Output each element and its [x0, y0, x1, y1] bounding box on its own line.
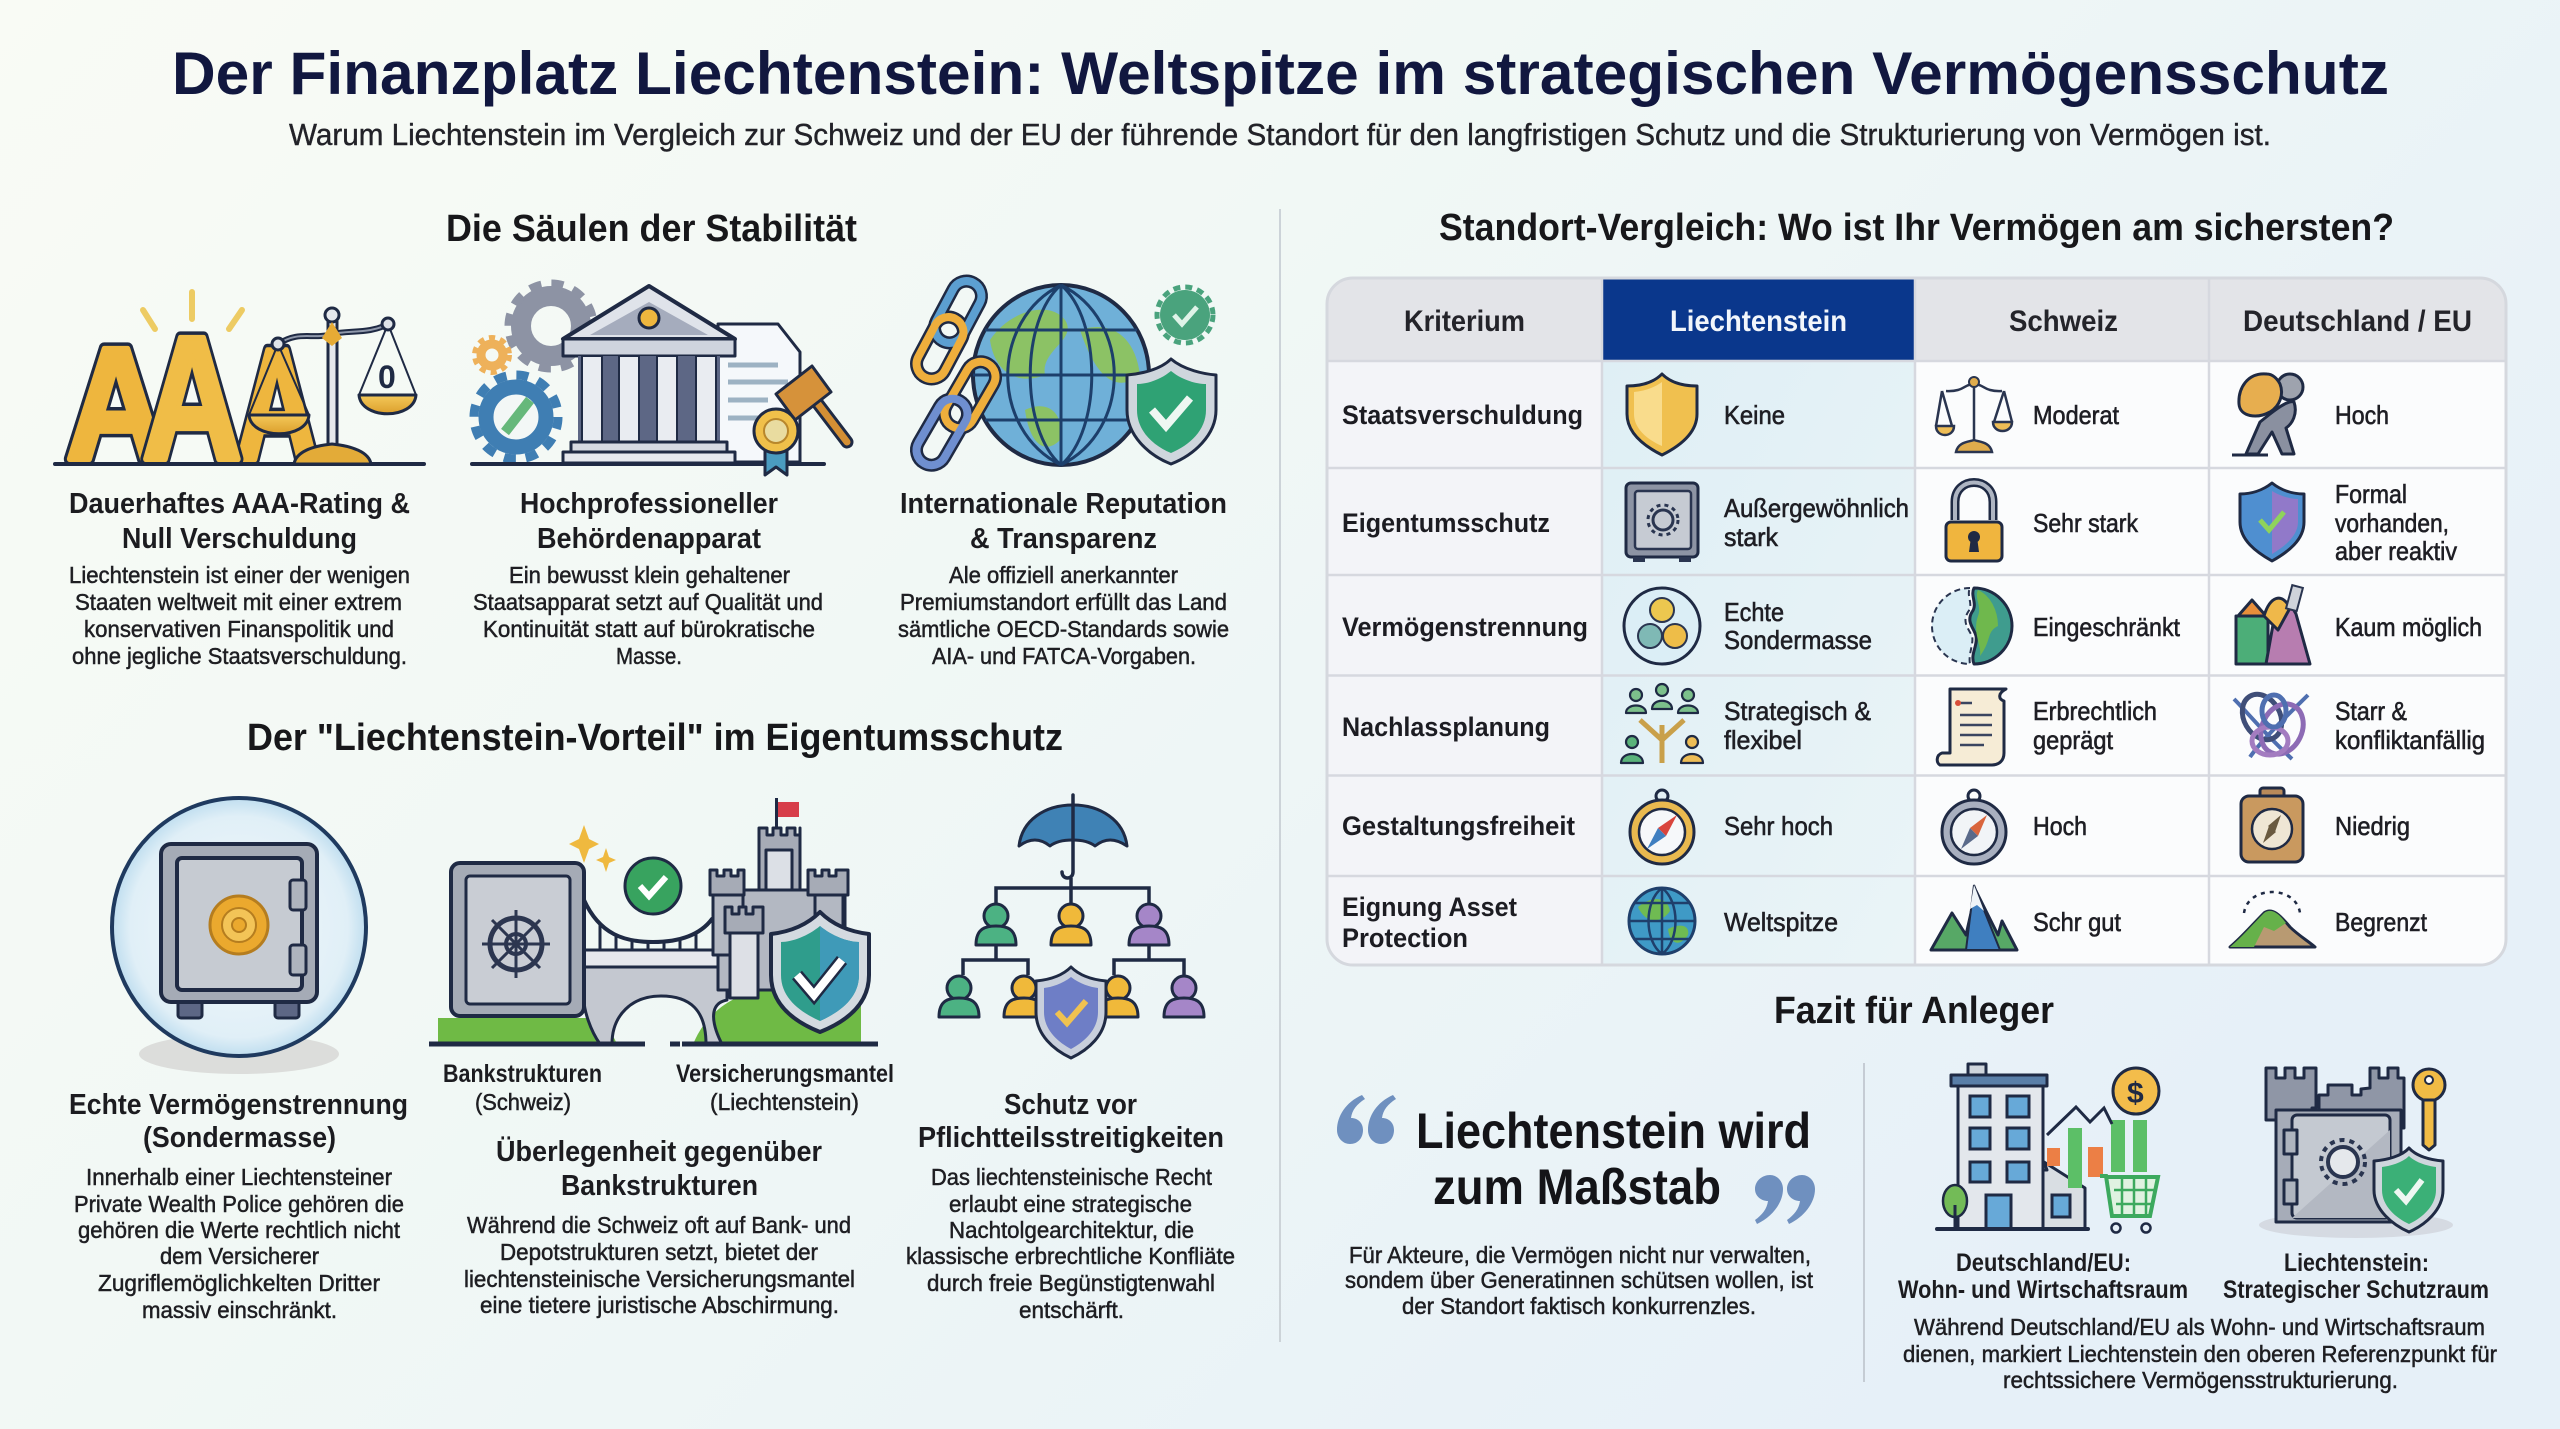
- row: Vermögenstrennung: Kaum möglich: [2335, 612, 2482, 642]
- card: AAA-Rating: [55, 292, 424, 669]
- callout heading: Liechtenstein wird: [1416, 1103, 1811, 1159]
- row: Staatsverschuldung: Moderat: [2033, 400, 2120, 430]
- row: Gestaltungsfreiheit: [1342, 788, 2410, 864]
- card body text: Private Wealth Police gehören die: [74, 1191, 404, 1217]
- heading: Standort-Vergleich: Standort-Vergleich: Wo ist Ihr Vermögen am sichersten?: [1439, 207, 2394, 249]
- row: Vermögenstrennung: Echte: [1724, 597, 1784, 627]
- subtitle: Warum Liechtenstein im Vergleich zur Schweiz und der EU der führende Standort für den langfristigen Schutz und die Strukturierung von Vermögen ist.: [289, 117, 2271, 152]
- card heading: Schutz vor: [1004, 1089, 1137, 1121]
- card body text: entschärft.: [1019, 1297, 1124, 1323]
- panel: Fazit für Anleger: [1337, 990, 2497, 1393]
- icon: padlock: [1946, 482, 2002, 561]
- quote body text: der Standort faktisch konkurrenzles.: [1402, 1293, 1756, 1319]
- table header: Kriterium: [1404, 305, 1525, 338]
- table header: [1404, 305, 2472, 338]
- card body text: ohne jegliche Staatsverschuldung.: [72, 643, 407, 669]
- card heading: [520, 488, 778, 555]
- icon: AAA letters with scale: A: [236, 317, 318, 493]
- card body text: liechtensteinische Versicherungsmantel: [464, 1266, 855, 1292]
- row: Gestaltungsfreiheit: Niedrig: [2335, 811, 2410, 841]
- card heading: [918, 1089, 1224, 1154]
- card body text: gehören die Werte rechtlich nicht: [78, 1217, 401, 1243]
- card heading: & Transparenz: [970, 523, 1157, 555]
- label: Bankstrukturen Schweiz: [443, 1060, 602, 1115]
- icon: person carrying sack: [2232, 374, 2303, 455]
- icon: bubble with coins: [1624, 588, 1700, 664]
- row: Vermögenstrennung: Eingeschränkt: [2033, 612, 2181, 642]
- icon: globe, chains, shield: [911, 276, 1216, 471]
- label: Versicherungsmantel Liechtenstein: [676, 1060, 894, 1115]
- title: Der Finanzplatz Liechtenstein: Weltspitze im strategischen Vermögensschutz: [172, 40, 2389, 107]
- card body text: [74, 1164, 404, 1323]
- card body text: klassische erbrechtliche Konfliäte: [906, 1243, 1235, 1269]
- icon: AAA letters with scale: A: [142, 301, 242, 497]
- card body text: dem Versicherer: [160, 1243, 319, 1269]
- row: Vermögenstrennung: Sondermasse: [1724, 625, 1872, 655]
- conclusion body text: [1903, 1314, 2497, 1393]
- row: Staatsverschuldung: Hoch: [2335, 400, 2389, 430]
- row: Eigentumsschutz: stark: [1724, 522, 1779, 552]
- row: Eignung Asset Protection: Eignung Asset: [1342, 892, 1517, 922]
- card body text: eine tietere juristische Abschirmung.: [480, 1292, 839, 1318]
- card heading: Überlegenheit gegenüber: [496, 1135, 822, 1168]
- label: Liechtenstein: [2223, 1249, 2489, 1304]
- icon: AAA letters with scale: A: [236, 317, 318, 493]
- row: Eigentumsschutz: [1342, 479, 2457, 566]
- icon: mountain: [1931, 885, 2017, 950]
- row: Eigentumsschutz: Eigentumsschutz: [1342, 508, 1550, 538]
- card body text: Nachtolgearchitektur, die: [949, 1217, 1194, 1243]
- card body text: Ale offiziell anerkannter: [949, 562, 1178, 588]
- icon: umbrella over family tree with shield: [939, 795, 1204, 1058]
- row: Staatsverschuldung: Staatsverschuldung: [1342, 400, 1583, 430]
- card heading: Null Verschuldung: [122, 523, 357, 555]
- label: Bankstrukturen Schweiz: Bankstrukturen: [443, 1060, 602, 1088]
- icon: silver compass: [1942, 790, 2006, 864]
- label: Versicherungsmantel Liechtenstein: Versicherungsmantel: [676, 1060, 894, 1088]
- row: Nachlassplanung: geprägt: [2033, 725, 2114, 755]
- row: Gestaltungsfreiheit: Gestaltungsfreiheit: [1342, 811, 1575, 841]
- card heading: Bankstrukturen: [561, 1170, 758, 1202]
- row: Eignung Asset Protection: [1342, 885, 2428, 954]
- label: Liechtenstein: Liechtenstein:: [2284, 1249, 2429, 1277]
- icon: gold compass: [1630, 790, 1694, 864]
- icon: institution with gears, document, gavel: [472, 284, 847, 475]
- heading: Liechtenstein-Vorteil: Der "Liechtenstein-Vorteil" im Eigentumsschutz: [247, 717, 1063, 759]
- icon: split circle: [1932, 588, 2012, 664]
- card body text: Das liechtensteinische Recht: [931, 1164, 1213, 1190]
- quote body text: sondem über Generatinnen schütsen wollen, ist: [1345, 1267, 1814, 1293]
- quote block: [1337, 1095, 1815, 1319]
- heading: Säulen: Die Säulen der Stabilität: [446, 208, 857, 250]
- icon: balance scale: [1936, 377, 2012, 452]
- heading: Fazit: Fazit für Anleger: [1774, 990, 2054, 1032]
- row: Eigentumsschutz: Außergewöhnlich: [1724, 493, 1909, 523]
- row: Eigentumsschutz: Formal: [2335, 479, 2407, 509]
- icon: AAA letters with scale: 0: [378, 359, 396, 395]
- card: Bankstrukturen: [429, 798, 894, 1318]
- card body text: [898, 562, 1229, 669]
- label: Deutschland/EU: Wohn- und Wirtschaftsraum: [1898, 1276, 2188, 1304]
- conclusion body text: dienen, markiert Liechtenstein den oberen Referenzpunkt für: [1903, 1341, 2497, 1367]
- row: Gestaltungsfreiheit: Sehr hoch: [1724, 811, 1833, 841]
- icon: family tree: [1621, 684, 1703, 763]
- icon: safe, bridge and castle: [429, 798, 878, 1044]
- card heading: [496, 1135, 822, 1202]
- icon: globe: [1629, 888, 1695, 954]
- row: Nachlassplanung: Strategisch &: [1724, 696, 1871, 726]
- label: Versicherungsmantel Liechtenstein: (Liechtenstein): [710, 1089, 859, 1115]
- row: Eignung Asset Protection: Weltspitze: [1724, 907, 1838, 937]
- label: Deutschland/EU: Deutschland/EU:: [1956, 1249, 2131, 1277]
- row: Vermögenstrennung: [1342, 585, 2482, 664]
- card body text: massiv einschränkt.: [142, 1297, 337, 1323]
- card heading: Hochprofessioneller: [520, 488, 778, 520]
- comparison table: [1327, 278, 2506, 965]
- icon: scroll: [1937, 689, 2006, 765]
- row: Eignung Asset Protection: Schr gut: [2033, 907, 2122, 937]
- table header: Liechtenstein: [1670, 305, 1847, 338]
- card heading: Dauerhaftes AAA-Rating &: [69, 488, 410, 520]
- panel: Standort-Vergleich: [1327, 207, 2506, 965]
- card heading: [69, 488, 410, 555]
- row: Nachlassplanung: Erbrechtlich: [2033, 696, 2157, 726]
- icon: stacked shapes: [2236, 585, 2310, 664]
- icon: gold shield: [1627, 374, 1697, 455]
- row: Eigentumsschutz: aber reaktiv: [2335, 536, 2457, 566]
- card body text: [906, 1164, 1235, 1323]
- conclusion body text: rechtssichere Vermögensstrukturierung.: [2003, 1367, 2398, 1393]
- label: Bankstrukturen Schweiz: (Schweiz): [475, 1089, 571, 1115]
- card body text: erlaubt eine strategische: [949, 1191, 1192, 1217]
- card heading: [69, 1089, 408, 1154]
- card body text: Kontinuität statt auf bürokratische: [483, 616, 815, 642]
- icon: city building, chart, cart and coin: [1937, 1064, 2159, 1232]
- card: Pflichtteilsstreitigkeiten: [906, 795, 1235, 1323]
- quote body text: Für Akteure, die Vermögen nicht nur verwalten,: [1349, 1242, 1811, 1268]
- row: Gestaltungsfreiheit: Hoch: [2033, 811, 2087, 841]
- icon: knot: [2234, 687, 2311, 761]
- row: Staatsverschuldung: [1342, 374, 2389, 455]
- card body text: [464, 1212, 855, 1318]
- icon: AAA letters with scale: [55, 292, 424, 497]
- card body text: [69, 562, 410, 669]
- card body text: Staatsapparat setzt auf Qualität und: [473, 589, 823, 615]
- panel: Die Säulen der Stabilität: [55, 208, 1229, 669]
- icon: AAA letters with scale: A: [142, 301, 242, 497]
- card body text: [473, 562, 823, 669]
- card heading: Echte Vermögenstrennung: [69, 1089, 408, 1121]
- row: Eignung Asset Protection: Protection: [1342, 923, 1468, 953]
- icon: safe in bubble: [112, 798, 366, 1074]
- card body text: Premiumstandort erfüllt das Land: [900, 589, 1227, 615]
- icon: closing quote mark: [1755, 1175, 1815, 1224]
- card heading: Internationale Reputation: [900, 488, 1227, 520]
- row: Nachlassplanung: Nachlassplanung: [1342, 712, 1550, 742]
- table header: Schweiz: [2009, 305, 2118, 338]
- card body text: Staaten weltweit mit einer extrem: [75, 589, 402, 615]
- icon: AAA letters with scale: A: [66, 314, 166, 493]
- conclusion body text: Während Deutschland/EU als Wohn- und Wirtschaftsraum: [1914, 1314, 2485, 1340]
- row: Nachlassplanung: [1342, 684, 2485, 765]
- card body text: durch freie Begünstigtenwahl: [927, 1270, 1215, 1296]
- label: Liechtenstein: Strategischer Schutzraum: [2223, 1276, 2489, 1304]
- table header: Deutschland / EU: [2243, 305, 2472, 338]
- card body text: Zugriflemöglichkelten Dritter: [98, 1270, 380, 1296]
- card body text: AIA- und FATCA-Vorgaben.: [932, 643, 1196, 669]
- icon: blue-purple shield with check: [2240, 483, 2304, 561]
- row: Vermögenstrennung: Vermögenstrennung: [1342, 612, 1588, 642]
- card heading: Pflichtteilsstreitigkeiten: [918, 1122, 1224, 1154]
- row: Staatsverschuldung: Keine: [1724, 400, 1785, 430]
- label: Deutschland/EU: [1898, 1249, 2188, 1304]
- card heading: Behördenapparat: [537, 523, 761, 555]
- card heading: [900, 488, 1227, 555]
- quote body text: [1345, 1242, 1814, 1319]
- icon: castle safe with key and shield: [2259, 1068, 2453, 1238]
- card body text: sämtliche OECD-Standards sowie: [898, 616, 1229, 642]
- row: Eigentumsschutz: Sehr stark: [2033, 508, 2139, 538]
- callout heading: [1416, 1103, 1811, 1215]
- card body text: Liechtenstein ist einer der wenigen: [69, 562, 410, 588]
- card: Reputation: [898, 276, 1229, 669]
- panel: Der Liechtenstein-Vorteil: [69, 717, 1235, 1323]
- icon: AAA letters with scale: A: [66, 314, 166, 493]
- card heading: (Sondermasse): [143, 1122, 336, 1154]
- row: Nachlassplanung: flexibel: [1724, 725, 1802, 755]
- icon: opening quote mark: [1337, 1095, 1396, 1144]
- card body text: Innerhalb einer Liechtensteiner: [86, 1164, 392, 1190]
- row: Nachlassplanung: konfliktanfällig: [2335, 725, 2485, 755]
- card body text: Depotstrukturen setzt, bietet der: [500, 1239, 818, 1265]
- card body text: konservativen Finanspolitik und: [84, 616, 394, 642]
- icon: square compass: [2241, 788, 2303, 862]
- card: Behördenapparat: [472, 284, 847, 669]
- icon: safe: [1626, 483, 1698, 562]
- callout heading: zum Maßstab: [1433, 1159, 1721, 1215]
- card body text: Ein bewusst klein gehaltener: [509, 562, 790, 588]
- icon: low hill with dashed arc: [2230, 892, 2315, 947]
- row: Nachlassplanung: Starr &: [2335, 696, 2407, 726]
- row: Eignung Asset Protection: Begrenzt: [2335, 907, 2428, 937]
- card body text: Masse.: [616, 643, 682, 669]
- card: Vermögenstrennung: [69, 798, 408, 1323]
- icon: city building, chart, cart and coin: $: [2127, 1077, 2144, 1110]
- row: Eigentumsschutz: vorhanden,: [2335, 508, 2449, 538]
- card body text: Während die Schweiz oft auf Bank- und: [467, 1212, 851, 1238]
